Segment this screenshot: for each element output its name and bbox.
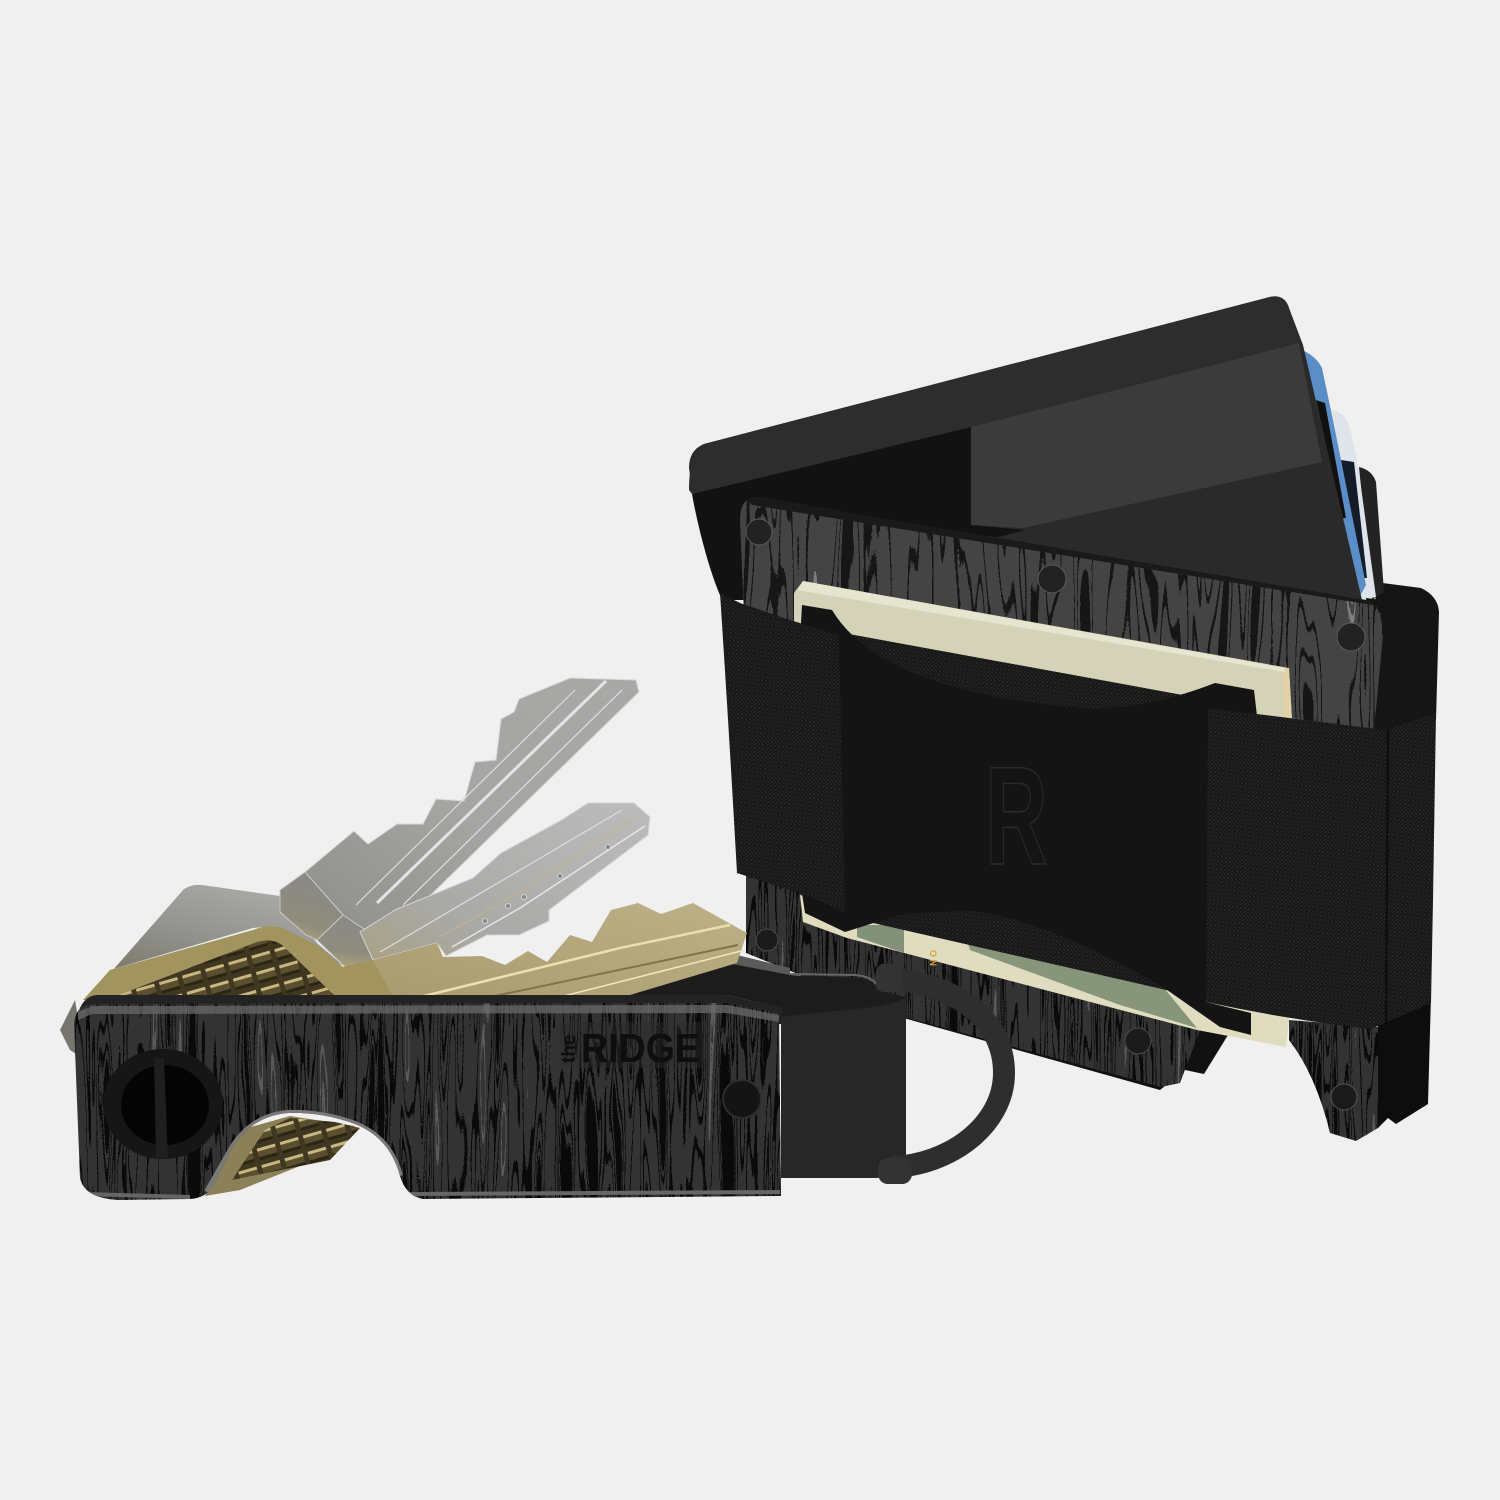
lower black base bbox=[900, 960, 1228, 1090]
blue card stripe bbox=[1316, 400, 1346, 518]
silver key, short bbox=[360, 803, 650, 960]
foot screw bbox=[1331, 1084, 1357, 1110]
organizer silver tail bbox=[60, 1000, 85, 1060]
lower wood plate bbox=[740, 865, 1205, 1090]
back card bbox=[1359, 467, 1384, 600]
housing front face bbox=[781, 997, 906, 1178]
banknote green print bbox=[857, 925, 904, 953]
key organizer bbox=[60, 678, 1004, 1205]
screws on upper plate bbox=[746, 519, 1365, 651]
rear plate lower feet bbox=[1378, 995, 1431, 1128]
screws on lower plate bbox=[756, 929, 1151, 1054]
blue card bbox=[1302, 350, 1366, 600]
cash stack, bottom bbox=[800, 895, 1290, 1047]
silver head block, lower bbox=[317, 915, 425, 967]
gold housing bbox=[83, 926, 395, 1000]
silver key, long bbox=[305, 678, 639, 960]
gold key bbox=[373, 903, 747, 998]
white card stripe bbox=[1341, 460, 1367, 578]
plate top edge bbox=[745, 493, 1384, 610]
lower gold base bbox=[205, 1116, 355, 1196]
right elastic band bbox=[1206, 708, 1436, 1029]
silver head block bbox=[280, 872, 343, 940]
elastic band behind clip bbox=[838, 632, 1210, 1000]
logo: RIDGE bbox=[581, 1025, 700, 1071]
lower right wood foot bbox=[1289, 1020, 1378, 1141]
lower knurled grip bbox=[232, 1118, 360, 1180]
card dark reflection bbox=[692, 427, 1025, 600]
left elastic band bbox=[720, 593, 845, 912]
embossed R logo: R bbox=[985, 738, 1048, 894]
silver housing bbox=[84, 885, 345, 1003]
money clip plate bbox=[737, 605, 1257, 1035]
housing top grey lip bbox=[727, 955, 790, 975]
upper wood plate bbox=[735, 490, 1390, 735]
wallet bbox=[689, 296, 1439, 1145]
D-ring bbox=[876, 964, 1004, 1184]
product illustration: wallet and key organizer bbox=[60, 296, 1439, 1200]
banknote serial letters: O N bbox=[928, 950, 938, 966]
card light reflection bbox=[971, 343, 1322, 528]
large black card bbox=[689, 296, 1362, 600]
logo plate shade bbox=[560, 1022, 710, 1068]
D-ring housing bbox=[620, 955, 906, 1178]
logo: the bbox=[559, 1034, 580, 1063]
rear wallet plate bbox=[1375, 582, 1439, 735]
housing rim highlight bbox=[790, 974, 876, 984]
body screw bbox=[723, 1080, 761, 1118]
knurled grip bbox=[106, 941, 337, 1000]
card top band bbox=[689, 296, 1299, 494]
cash stack, top bbox=[794, 581, 1292, 720]
plate dark side bbox=[1366, 598, 1400, 735]
wood body bbox=[70, 1000, 785, 1205]
pivot knob bbox=[103, 1049, 223, 1159]
body top rim bbox=[76, 995, 782, 1034]
white card bbox=[1332, 410, 1376, 600]
